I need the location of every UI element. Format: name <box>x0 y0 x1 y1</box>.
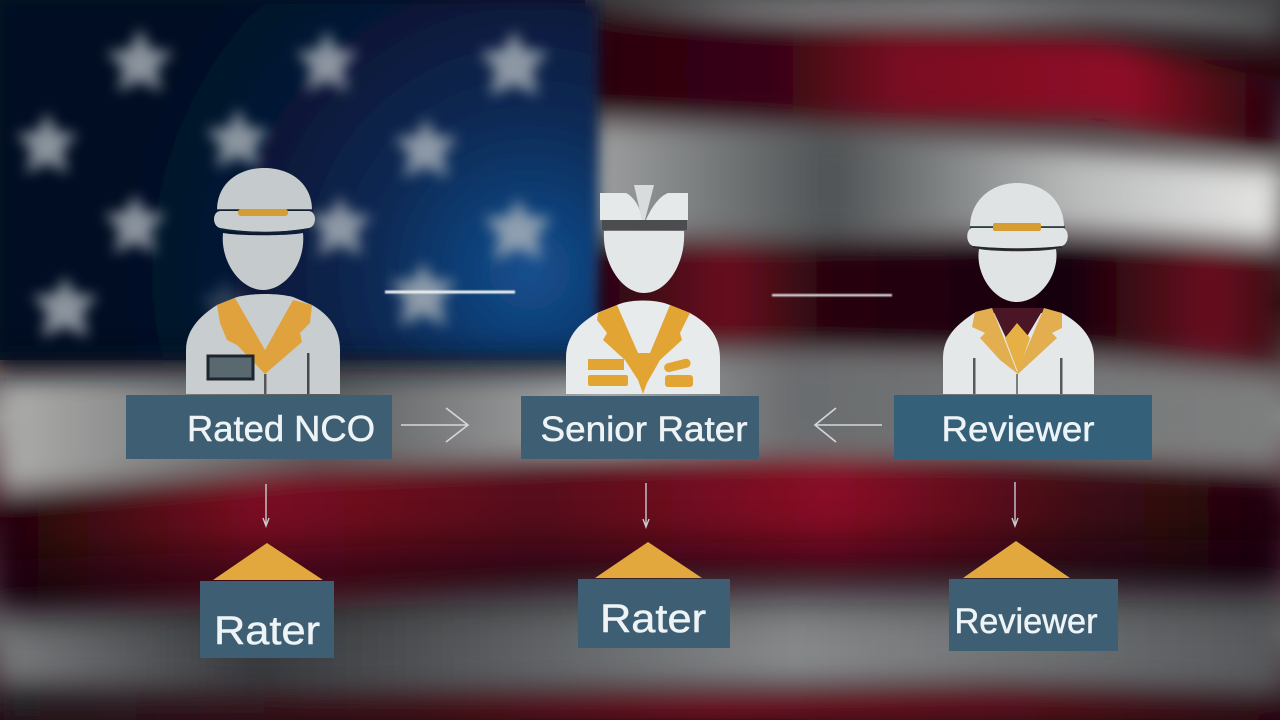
arrow: down right <box>1012 482 1018 526</box>
shirt <box>992 308 1044 338</box>
collar <box>597 305 690 394</box>
soft shadow under canton <box>0 352 590 378</box>
figure: Senior Rater <box>566 185 720 394</box>
card: Rater centre <box>578 542 730 648</box>
torso <box>943 313 1094 394</box>
face <box>223 233 303 290</box>
arrow: Reviewer to Senior Rater <box>815 408 882 442</box>
collar <box>217 298 312 374</box>
glint line: left <box>385 290 515 294</box>
face <box>604 231 684 293</box>
stars <box>16 28 552 338</box>
helmet <box>214 168 315 233</box>
torso <box>566 300 720 394</box>
figure: Reviewer <box>943 183 1094 394</box>
card: Reviewer right <box>949 541 1118 651</box>
card: Rater centre: Rater <box>600 597 706 641</box>
label: Senior Rater <box>521 396 759 459</box>
label: Senior Rater: Senior Rater <box>540 410 748 449</box>
rank badges <box>588 358 693 387</box>
cap <box>600 193 688 220</box>
arrow: down left <box>263 484 269 526</box>
label: Rated NCO <box>126 395 392 459</box>
arrow: Rated NCO to Senior Rater <box>401 408 468 442</box>
face <box>978 249 1057 302</box>
glint line: right <box>772 294 892 296</box>
label: Reviewer: Reviewer <box>942 410 1095 449</box>
figure: Rated NCO <box>186 168 340 394</box>
helmet <box>970 183 1064 227</box>
label: Reviewer <box>894 395 1152 460</box>
card: Rater left: Rater <box>214 609 320 653</box>
label: Rated NCO: Rated NCO <box>187 408 375 449</box>
arrow: down centre <box>643 483 649 527</box>
card: Reviewer right: Reviewer <box>954 602 1098 641</box>
collar and tie <box>972 308 1062 374</box>
card: Rater left <box>200 543 334 658</box>
name tag <box>208 356 253 379</box>
dark shading on lower red stripe <box>0 540 1280 620</box>
torso <box>186 294 340 394</box>
